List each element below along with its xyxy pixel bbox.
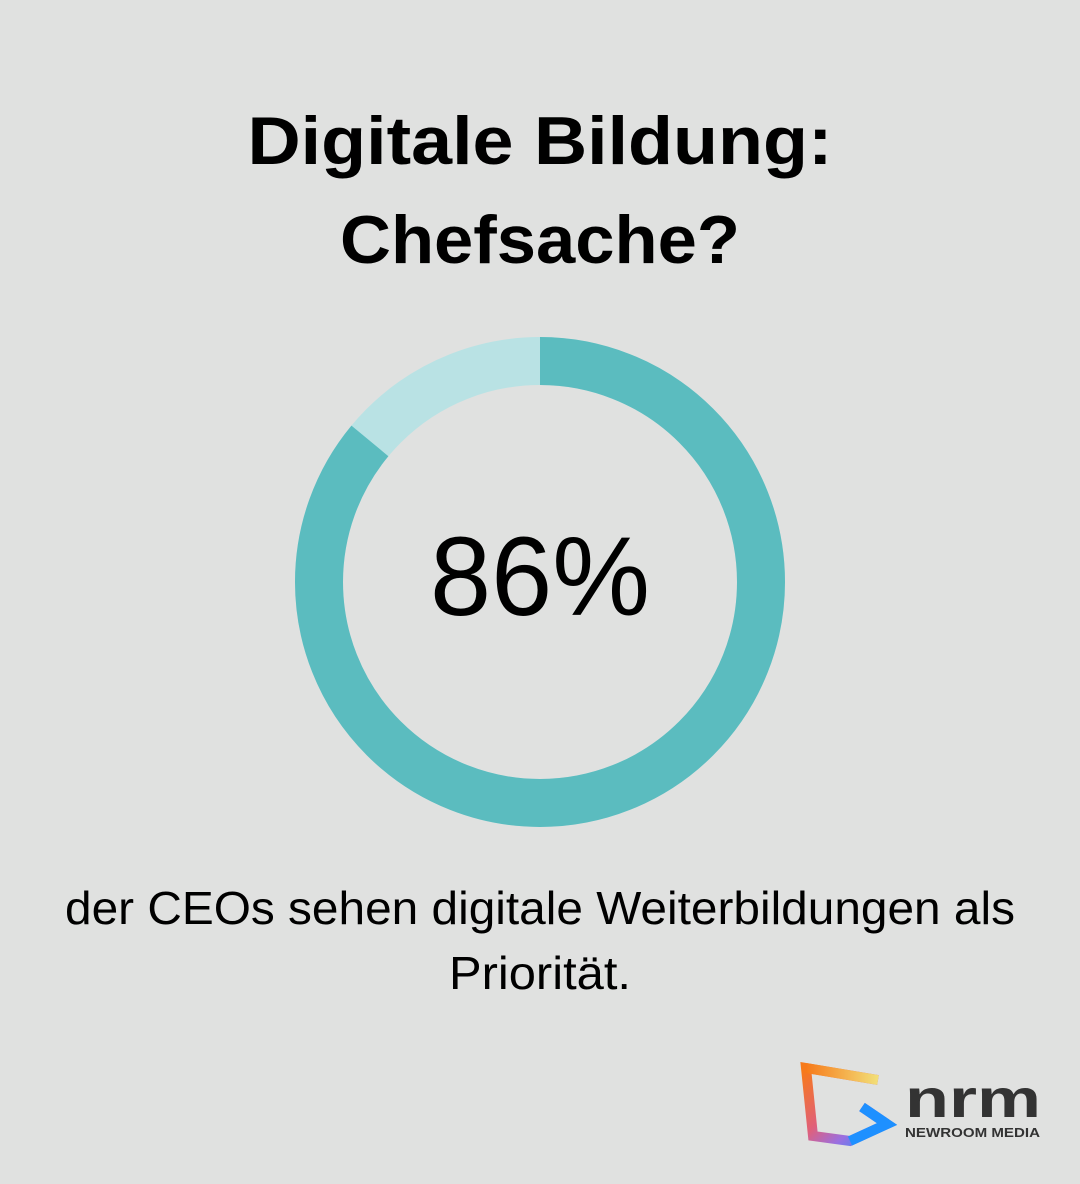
title: Chefsache? — [340, 202, 740, 278]
donut chart — [319, 361, 761, 803]
logo: nrm — [905, 1069, 1041, 1129]
logo — [806, 1068, 1041, 1141]
title — [248, 103, 832, 278]
description text — [65, 882, 1015, 999]
percentage value: 86% — [430, 514, 650, 639]
logo: NEWROOM MEDIA — [905, 1125, 1041, 1140]
description text: der CEOs sehen digitale Weiterbildungen als — [65, 882, 1015, 934]
title: Digitale Bildung: — [248, 103, 832, 179]
description text: Priorität. — [449, 947, 631, 999]
